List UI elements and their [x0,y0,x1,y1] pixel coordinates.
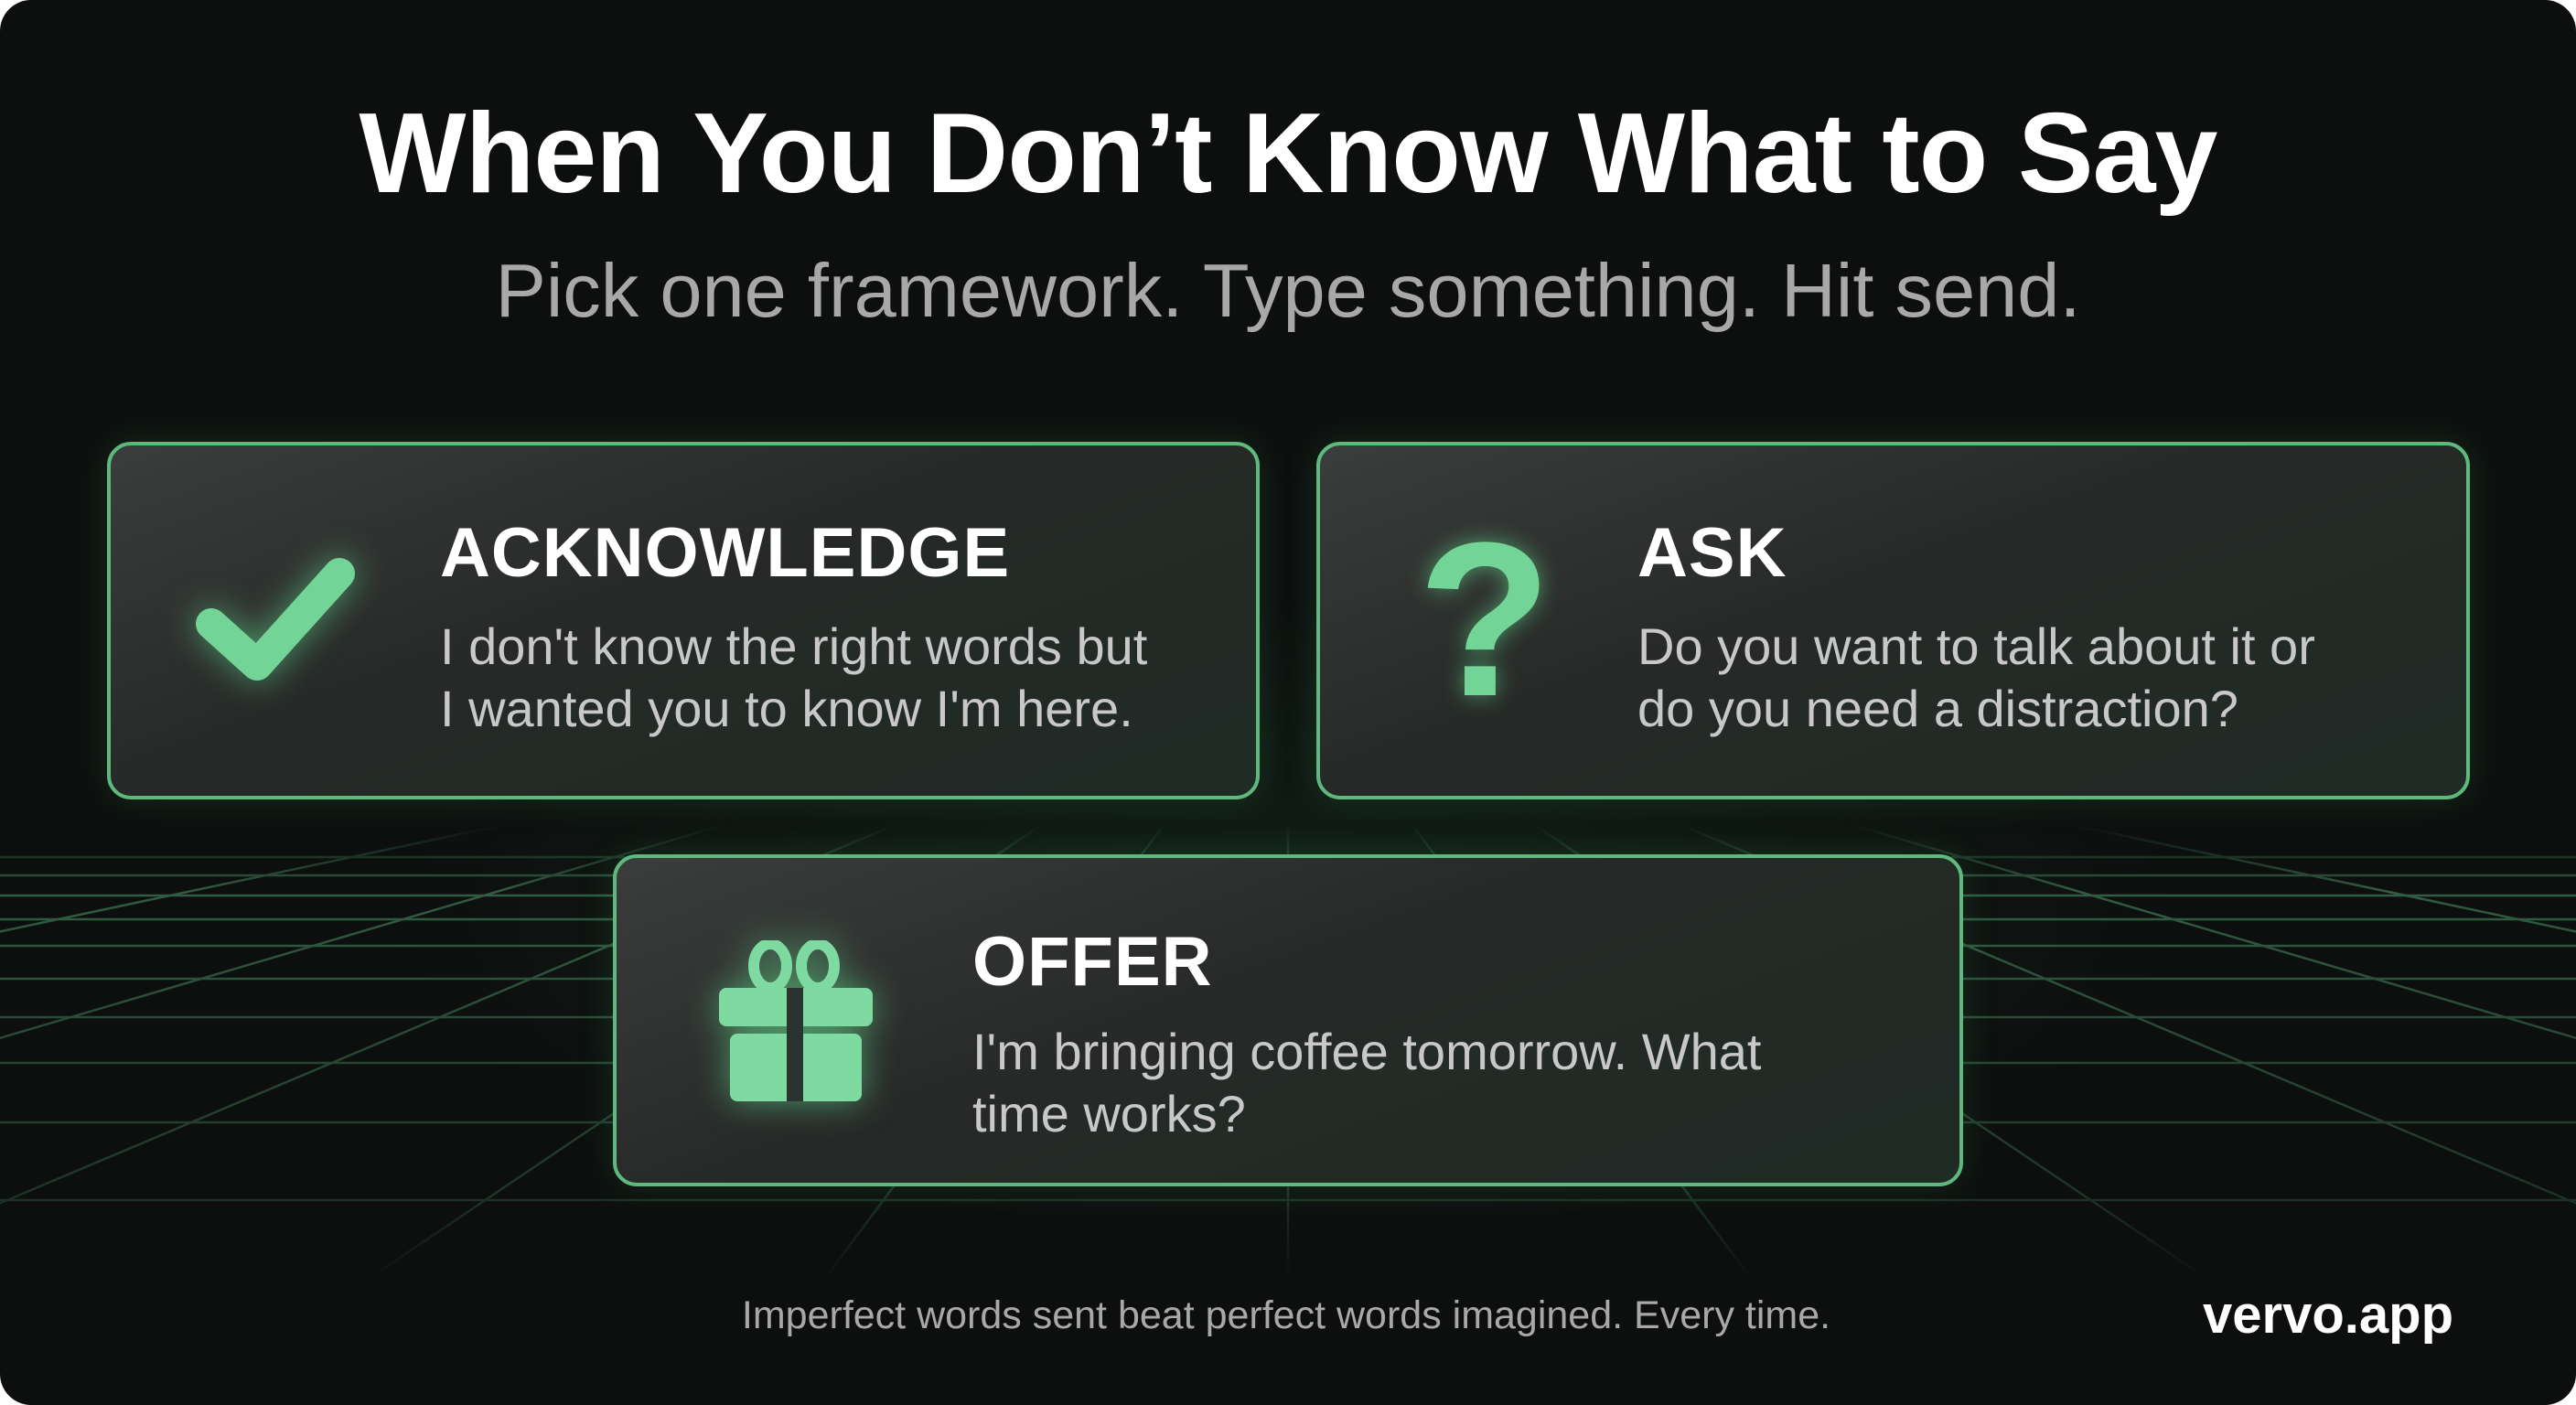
panel: acknowledge [107,442,1260,799]
body text: I'm bringing coffee tomorrow. What [972,1023,1761,1080]
heading: ACKNOWLEDGE [440,514,1010,592]
icon: gift [701,924,891,1123]
heading: ASK [1637,514,1787,592]
body text: time works? [972,1085,1246,1142]
body text [440,617,1147,737]
panel: ask [1316,442,2470,799]
body text [1637,617,2315,737]
body text: I wanted you to know I'm here. [440,680,1133,737]
body text [972,1023,1762,1142]
body text: do you need a distraction? [1637,680,2238,737]
icon: checkmark [180,542,371,697]
title: When You Don’t Know What to Say [360,91,2216,217]
background grid [0,831,2576,1260]
body text: I don't know the right words but [440,617,1147,675]
icon: question mark: ? [1418,497,1551,742]
body text: Do you want to talk about it or [1637,617,2315,675]
footer tagline: Imperfect words sent beat perfect words imagined. Every time. [742,1293,1830,1337]
subtitle: Pick one framework. Type something. Hit send. [495,248,2081,333]
panel: offer [613,854,1963,1186]
brand: vervo.app [2203,1285,2453,1345]
heading: OFFER [972,923,1213,1001]
